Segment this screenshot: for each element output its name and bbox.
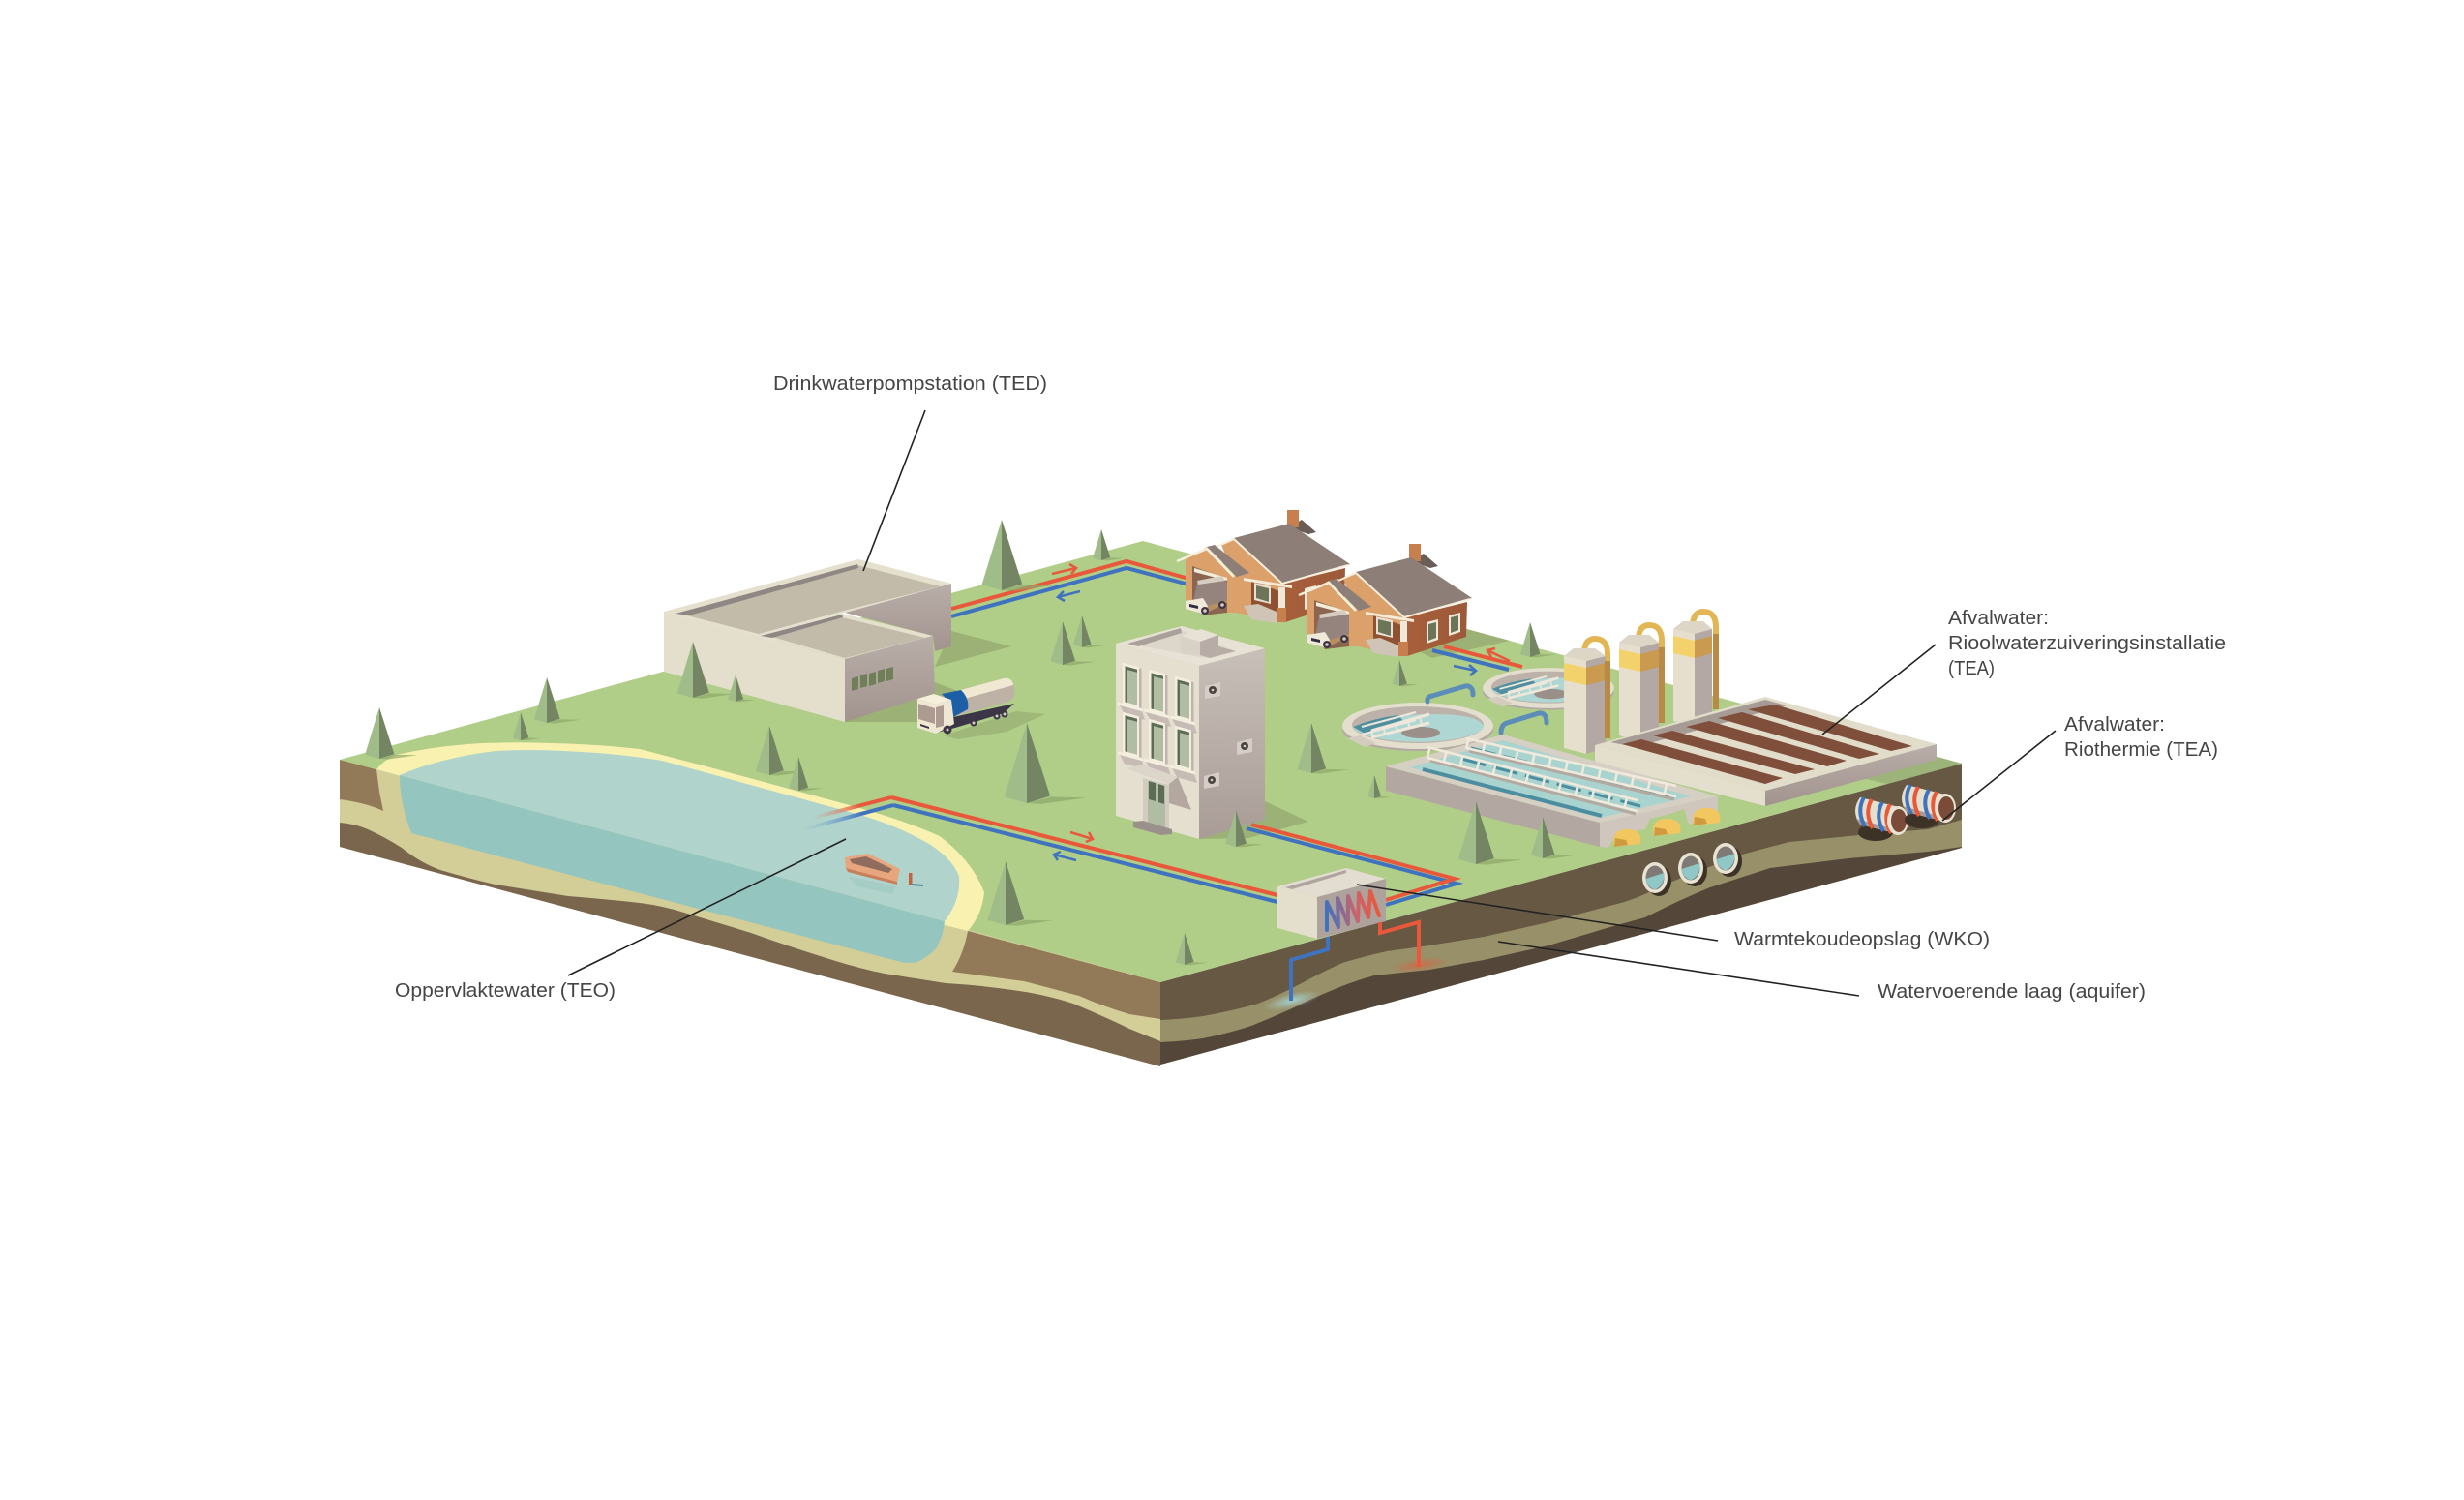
pipes: warm and cold network: [803, 561, 1522, 905]
wing roof: [761, 614, 933, 659]
main roof: [1234, 524, 1350, 584]
grass surface: [340, 541, 1962, 982]
back wall: [845, 584, 951, 651]
pipes behind pump station: [951, 561, 1192, 616]
pipe 2: [1902, 785, 1956, 828]
heat exchanger coil: [1327, 891, 1379, 930]
house 1: [1177, 510, 1350, 623]
eaves: [1177, 549, 1234, 577]
long wall: [664, 612, 845, 722]
digester silos: [1564, 612, 1716, 754]
yellow mounds: [1613, 808, 1720, 847]
sludge drying beds: [1595, 697, 1937, 806]
house 2: [1299, 544, 1472, 657]
water outfall pipes: [1642, 843, 1742, 896]
label: riothermie: [2064, 714, 2218, 761]
shadows on grass: [845, 619, 1510, 839]
pipe 1: [1855, 797, 1908, 841]
lake cross-section: [400, 775, 945, 963]
window: [1254, 583, 1271, 604]
windows: [1118, 661, 1197, 783]
trees: [365, 520, 1574, 965]
label: riothermie: Riothermie (TEA): [2064, 739, 2218, 761]
outfall 2: [1678, 853, 1707, 886]
pipes from tower to storage: [1247, 825, 1457, 905]
chimney: [1289, 520, 1316, 534]
leader lines: [568, 410, 2056, 996]
heat-cold storage unit: [1277, 868, 1386, 939]
lake surface: [400, 750, 959, 921]
roof: [1116, 626, 1265, 666]
label: wastewater treatment plant: [1948, 608, 2226, 679]
label: wastewater treatment plant: Rioolwaterzuiveringsinstallatie: [1948, 633, 2226, 654]
tanker truck: [917, 678, 1014, 734]
wall fans: [1204, 682, 1252, 789]
end wall: [845, 636, 935, 722]
label: wastewater treatment plant: Afvalwater:: [1948, 608, 2049, 629]
sludge strips: [1622, 705, 1912, 784]
parked van: [1186, 579, 1227, 615]
silo 1: [1564, 639, 1608, 754]
silo 3: [1673, 612, 1716, 726]
label: riothermie: Afvalwater:: [2064, 714, 2165, 735]
side brick wall: [1282, 568, 1345, 622]
silo 2: [1619, 625, 1662, 741]
left soil cross-section: [340, 760, 1160, 1066]
entrance: [1126, 765, 1191, 835]
boat: [845, 854, 923, 894]
pipes behind houses: [1432, 646, 1522, 670]
side windows: [1305, 585, 1316, 610]
label: drinking water pump station: Drinkwaterpompstation (TED): [773, 374, 1047, 395]
railings: [1427, 738, 1676, 811]
pipes from lake to storage: [803, 797, 1277, 902]
outfall 3: [1713, 843, 1742, 877]
flow arrows: [1052, 564, 1510, 860]
garage: [1186, 547, 1236, 613]
main roof: [664, 559, 951, 659]
label: wastewater treatment plant: (TEA): [1948, 658, 1995, 679]
gable wall: [1221, 540, 1282, 622]
settling basin: [1386, 735, 1720, 848]
darker grass edge: [1862, 757, 1962, 784]
apartment tower: [1116, 626, 1265, 839]
underground wells: [1262, 922, 1450, 1015]
porch: [1244, 578, 1292, 588]
panel: terrain block: [340, 541, 1962, 1066]
sewer pipes with heat exchanger bands: [1855, 785, 1956, 841]
outfall 1: [1642, 862, 1671, 896]
label: surface water: Oppervlaktewater (TEO): [395, 980, 616, 1002]
drinking water pump station: [664, 559, 951, 722]
label: heat-cold storage: Warmtekoudeopslag (WKO): [1734, 929, 1990, 950]
connecting pipes between clarifiers: [1427, 686, 1547, 733]
windows: [852, 667, 893, 691]
garage roof: [1207, 545, 1249, 577]
right soil cross-section with aquifer layer: [1160, 764, 1962, 1065]
clarifier tank 1: [1342, 703, 1493, 751]
clarifier tank 2: [1483, 668, 1614, 710]
label: aquifer: Watervoerende laag (aquifer): [1878, 981, 2146, 1003]
walls: [1116, 644, 1199, 839]
beach: [376, 742, 984, 931]
